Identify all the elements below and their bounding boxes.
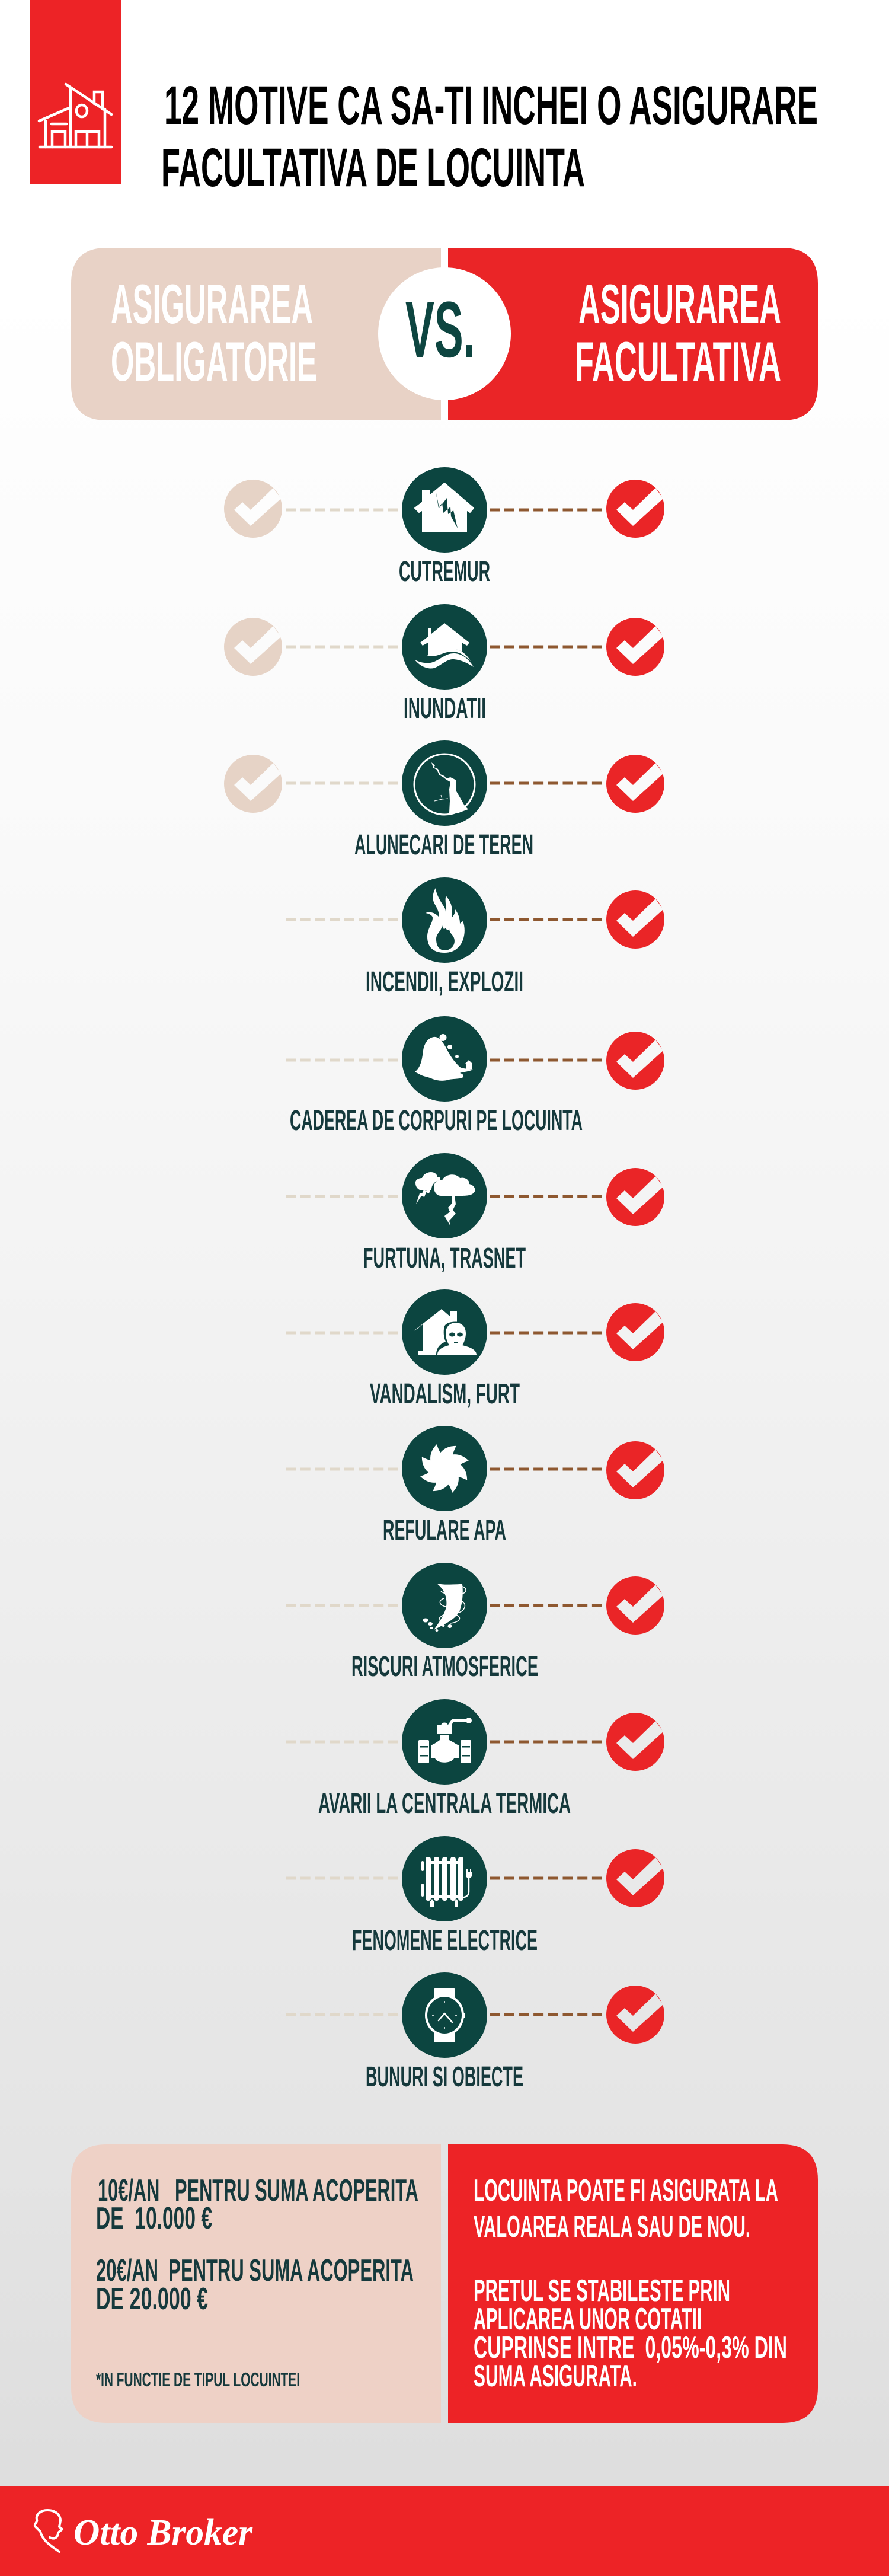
- icon: red tab with house: [30, 0, 121, 184]
- vs badge: [378, 267, 511, 400]
- label: CUTREMUR: [399, 556, 490, 588]
- check: facultativa: [606, 618, 664, 676]
- vs badge: VS.: [405, 286, 475, 374]
- row: inundatii: [224, 604, 664, 724]
- label: VANDALISM, FURT: [370, 1378, 520, 1410]
- panel: price obligatorie: DE 20.000 €: [96, 2282, 208, 2316]
- label: ALUNECARI DE TEREN: [354, 829, 533, 861]
- check: obligatorie: [224, 480, 282, 538]
- panel: price facultativa: APLICAREA UNOR COTATII: [474, 2302, 702, 2336]
- panel: price facultativa: SUMA ASIGURATA.: [474, 2359, 637, 2393]
- check: facultativa: [606, 1986, 664, 2044]
- icon: landslide: [402, 740, 487, 826]
- label: BUNURI SI OBIECTE: [366, 2061, 523, 2093]
- label: INUNDATII: [404, 693, 486, 724]
- check: facultativa: [606, 1441, 664, 1499]
- icon: valve: [402, 1699, 487, 1785]
- check: obligatorie: [224, 755, 282, 813]
- check: facultativa: [606, 755, 664, 813]
- label: FENOMENE ELECTRICE: [352, 1925, 538, 1956]
- row: caderea de corpuri pe locuinta: [286, 1016, 664, 1137]
- icon: storm clouds: [402, 1153, 487, 1238]
- panel: price obligatorie: DE 10.000 €: [96, 2201, 212, 2236]
- title: [161, 75, 818, 198]
- check: facultativa: [606, 890, 664, 949]
- row: avarii la centrala termica: [286, 1699, 664, 1820]
- row: alunecari de teren: [224, 740, 664, 861]
- icon: burglar and house: [402, 1289, 487, 1375]
- label: AVARII LA CENTRALA TERMICA: [318, 1788, 571, 1820]
- icon: flooded house: [402, 604, 487, 690]
- icon: swirl: [402, 1426, 487, 1511]
- panel: price obligatorie: 10€/AN PENTRU SUMA ACOPERITA: [98, 2173, 418, 2208]
- logo wordmark: Otto Broker: [73, 2513, 253, 2553]
- check: facultativa: [606, 1168, 664, 1226]
- icon: radiator: [402, 1836, 487, 1921]
- row: bunuri si obiecte: [286, 1972, 664, 2093]
- icon: flame: [402, 877, 487, 963]
- row: vandalism, furt: [286, 1289, 664, 1410]
- panel: price obligatorie: *IN FUNCTIE DE TIPUL LOCUINTEI: [96, 2368, 300, 2390]
- title: FACULTATIVA DE LOCUINTA: [161, 138, 585, 198]
- check: facultativa: [606, 1032, 664, 1090]
- row: fenomene electrice: [286, 1836, 664, 1956]
- row: riscuri atmosferice: [286, 1563, 664, 1683]
- panel: price facultativa: [448, 2144, 818, 2423]
- row: refulare apa: [286, 1426, 664, 1546]
- icon: otto broker head logo: [35, 2510, 62, 2552]
- label: CADEREA DE CORPURI PE LOCUINTA: [290, 1105, 583, 1137]
- check: facultativa: [606, 480, 664, 538]
- check: facultativa: [606, 1849, 664, 1907]
- check: facultativa: [606, 1576, 664, 1635]
- panel: asigurarea obligatorie: ASIGURAREA: [111, 273, 313, 335]
- label: FURTUNA, TRASNET: [363, 1243, 526, 1274]
- panel: price obligatorie: [71, 2144, 441, 2423]
- label: RISCURI ATMOSFERICE: [351, 1651, 538, 1683]
- label: REFULARE APA: [383, 1515, 506, 1546]
- panel: asigurarea facultativa: [448, 248, 818, 420]
- footer: [0, 2486, 889, 2576]
- panel: asigurarea obligatorie: OBLIGATORIE: [111, 330, 317, 392]
- icon: falling rocks on house: [402, 1016, 487, 1102]
- row: incendii, explozii: [286, 877, 664, 998]
- comparison banner: [71, 248, 818, 420]
- panel: price obligatorie: 20€/AN PENTRU SUMA ACOPERITA: [96, 2253, 414, 2288]
- check: facultativa: [606, 1713, 664, 1771]
- label: INCENDII, EXPLOZII: [366, 966, 523, 998]
- icon: earthquake house: [402, 467, 487, 553]
- row: cutremur: [224, 467, 664, 588]
- icon: tornado: [402, 1563, 487, 1648]
- panel: asigurarea obligatorie: [71, 248, 441, 420]
- icon: wristwatch: [402, 1972, 487, 2058]
- check: obligatorie: [224, 618, 282, 676]
- check: facultativa: [606, 1303, 664, 1361]
- row: furtuna, trasnet: [286, 1153, 664, 1274]
